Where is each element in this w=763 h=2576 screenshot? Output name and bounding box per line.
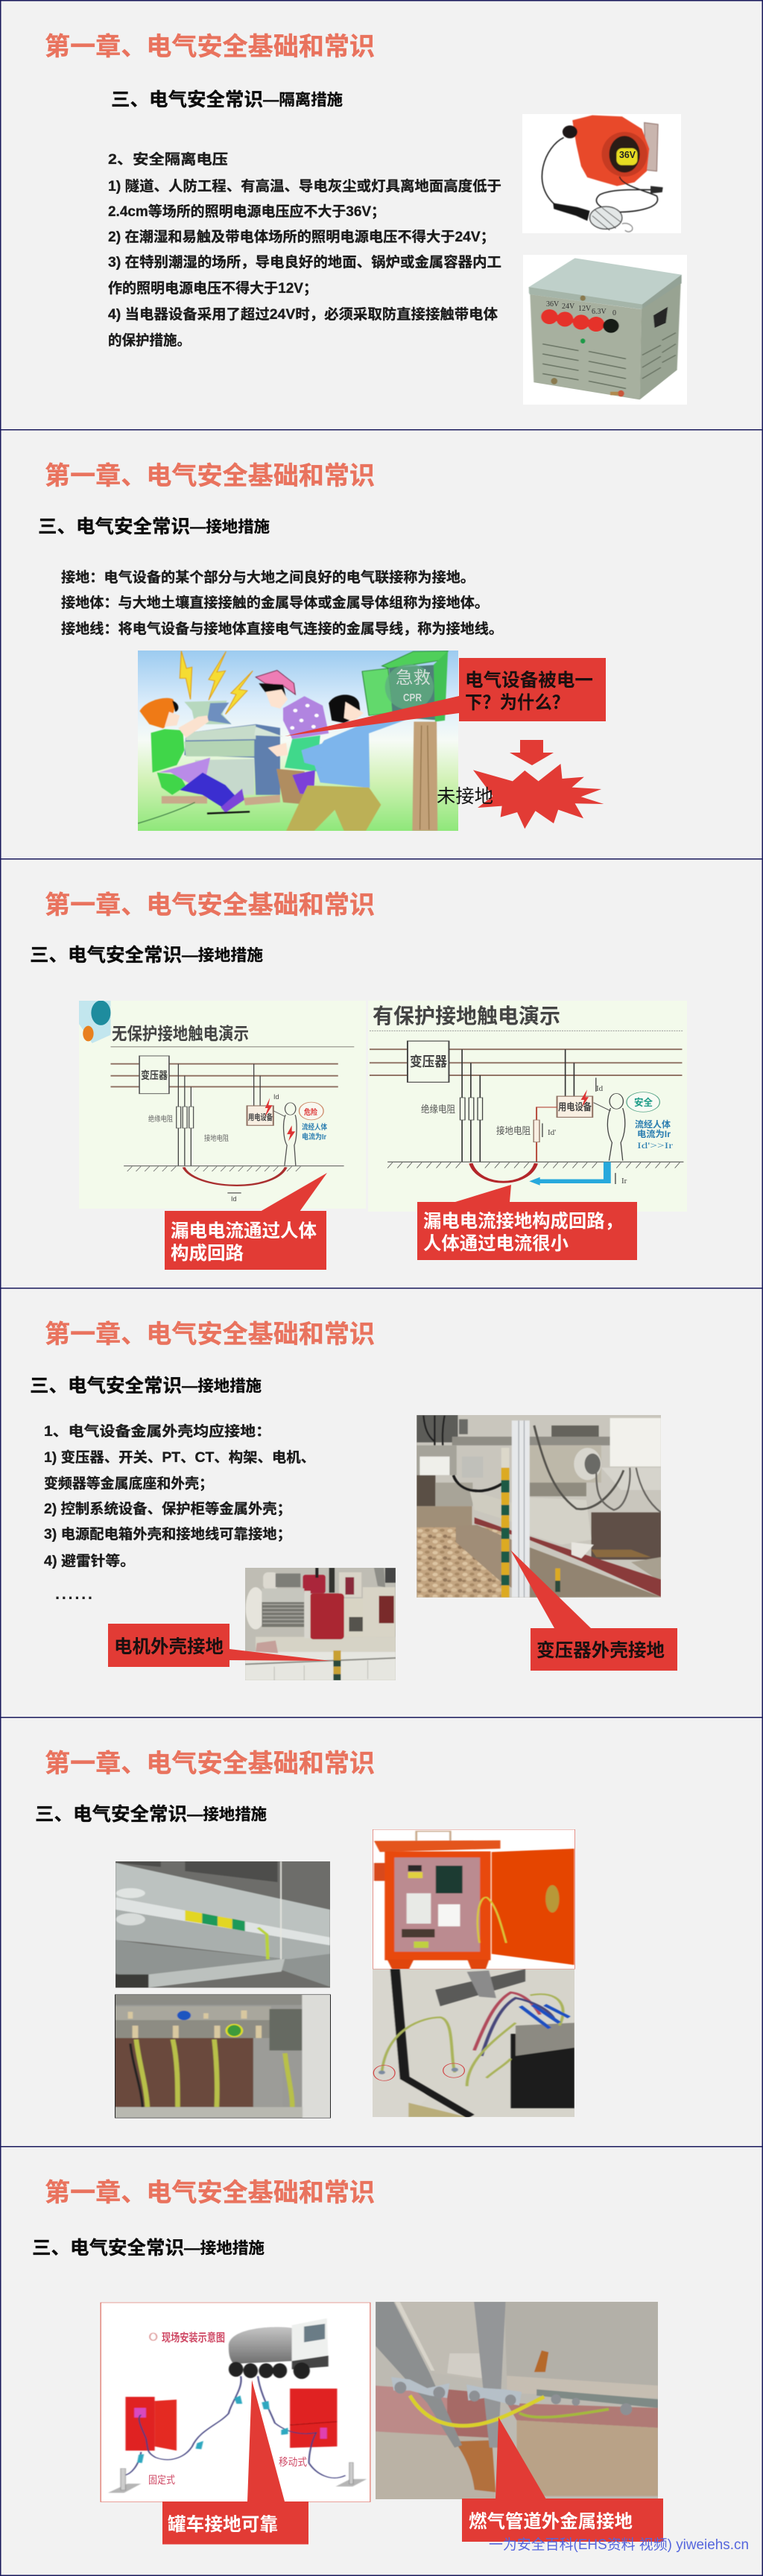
text block: safety voltages [108, 151, 501, 349]
callout: transformer enclosure grounding [510, 1550, 677, 1671]
section heading: 三、电气安全常识 [35, 1804, 187, 1825]
callout: leakage through body: 构成回路 [171, 1243, 244, 1264]
photo: orange distribution cabinet [373, 1829, 575, 1969]
callout: why shocked: 电气设备被电一 [465, 670, 593, 691]
diagram labels [141, 1069, 327, 1203]
diagram labels: Id [273, 1093, 279, 1101]
illustration: electric shock cartoon [138, 651, 458, 831]
label: not grounded: 未接地 [437, 786, 493, 807]
callout: gas pipeline metal grounding: 燃气管道外金属接地 [469, 2511, 633, 2532]
title: 第一章、电气安全基础和常识 [45, 1750, 375, 1778]
title: 第一章、电气安全基础和常识 [45, 1320, 375, 1349]
diagram labels: 移动式 [279, 2456, 307, 2468]
diagram labels: 固定式 [148, 2474, 175, 2486]
diagram title: 无保护接地触电演示 [112, 1024, 249, 1043]
diagram labels: Id [596, 1084, 604, 1093]
label: transformer voltages: 12V [578, 305, 592, 313]
text block: enclosure grounding list: 2) 控制系统设备、保护柜等金属外壳； [44, 1500, 291, 1517]
callout: tanker grounding reliable: 罐车接地可靠 [168, 2514, 278, 2535]
photo: 36V cable reel lamp [522, 114, 681, 233]
diagram labels: 流经人体 [635, 1118, 671, 1130]
diagram labels: 电流为Ir [637, 1128, 671, 1139]
text block: enclosure grounding list: 变频器等金属底座和外壳； [44, 1475, 213, 1492]
section heading [32, 2238, 265, 2259]
diagram: without protective grounding [79, 1001, 366, 1209]
text block: safety voltages: 的保护措施。 [108, 332, 191, 349]
callout: motor enclosure grounding: 电机外壳接地 [114, 1636, 224, 1657]
panel: slide 6 tanker and pipeline grounding [1, 2147, 762, 2575]
arrow: down [510, 740, 554, 765]
diagram labels: 变压器 [410, 1054, 447, 1069]
panel: slide 4 equipment enclosure grounding [1, 1288, 762, 1718]
text block: definitions: 接地线：将电气设备与接地体直接电气连接的金属导线，称为接地线。 [61, 620, 503, 637]
diagram labels: 安全 [634, 1097, 653, 1108]
label: transformer voltages: 36V [546, 300, 560, 308]
text block: safety voltages: 3) 在特别潮湿的场所，导电良好的地面、锅炉或金属容器内工 [108, 253, 501, 270]
icon: starburst [473, 764, 604, 829]
section heading: 三、电气安全常识 [32, 2238, 184, 2259]
callout: tanker grounding reliable [162, 2380, 308, 2544]
diagram labels: 接地电阻 [204, 1133, 229, 1143]
section heading: 三、电气安全常识 [111, 89, 263, 110]
panel: slide 2 grounding definitions [1, 430, 762, 859]
watermark footer: 一为安全百科(EHS资料 视频) yiweiehs.cn [489, 2537, 749, 2553]
callout: gas pipeline metal grounding [462, 2417, 663, 2542]
text block: enclosure grounding list: ...... [55, 1584, 92, 1603]
callout: leakage through ground: 人体通过电流很小 [423, 1233, 569, 1254]
photo: gas pipeline grounding jumper [376, 2302, 658, 2499]
callout: motor enclosure grounding [108, 1624, 331, 1667]
callout: leakage through ground: 漏电电流接地构成回路， [423, 1211, 623, 1232]
text: first aid sign: CPR [403, 692, 422, 704]
diagram labels [148, 2331, 307, 2486]
label: transformer voltages: 24V [562, 303, 575, 311]
text block: enclosure grounding list: 1、电气设备金属外壳均应接地： [44, 1423, 271, 1440]
panel: slide 3 grounding demonstration [1, 859, 762, 1288]
section heading: —接地措施 [182, 947, 263, 964]
diagram labels: 现场安装示意图 [162, 2331, 225, 2344]
photo: PE busbar [115, 1994, 331, 2118]
label: transformer voltages [546, 300, 616, 317]
diagram labels: 绝缘电阻 [148, 1114, 173, 1124]
panel: slide 5 grounding photos [1, 1718, 762, 2147]
diagram labels: Ir [621, 1177, 627, 1186]
section heading [30, 945, 263, 966]
section heading: —接地措施 [187, 1806, 267, 1823]
diagram labels: Id' [548, 1128, 556, 1137]
text block: safety voltages: 2.4cm等场所的照明电源电压应不大于36V； [108, 203, 385, 220]
diagram labels: 用电设备 [248, 1112, 273, 1122]
title: 第一章、电气安全基础和常识 [45, 33, 375, 61]
text block: enclosure grounding list: 1) 变压器、开关、PT、CT、构架、电机、 [44, 1449, 315, 1466]
diagram: tanker truck grounding [100, 2303, 371, 2502]
text: first aid sign: 急救 [396, 668, 431, 687]
text block: enclosure grounding list: 3) 电源配电箱外壳和接地线可靠接地； [44, 1526, 291, 1542]
photo: cable tray grounding [115, 1861, 330, 1988]
text: first aid sign [396, 668, 431, 704]
title: 第一章、电气安全基础和常识 [45, 891, 375, 920]
diagram labels: 变压器 [141, 1069, 168, 1081]
diagram labels: 用电设备 [558, 1101, 592, 1113]
section heading: 三、电气安全常识 [30, 1376, 182, 1396]
callout: why shocked: 下？为什么？ [465, 692, 569, 713]
text block: safety voltages: 4) 当电器设备采用了超过24V时，必须采取防直接接触带电体 [108, 306, 498, 323]
section heading: —隔离措施 [263, 91, 343, 109]
photo: cabinet interior grounding wires [373, 1969, 574, 2118]
diagram labels: 绝缘电阻 [421, 1104, 455, 1115]
callout: leakage through body [165, 1173, 327, 1270]
section heading: —接地措施 [184, 2240, 265, 2257]
diagram labels: Id'>>Ir [637, 1140, 673, 1151]
text block: safety voltages: 1) 隧道、人防工程、有高温、导电灰尘或灯具离地面高度低于 [108, 177, 501, 194]
text block: definitions: 接地：电气设备的某个部分与大地之间良好的电气联接称为接地。 [61, 569, 475, 586]
callout: leakage through body: 漏电电流通过人体 [171, 1221, 317, 1241]
section heading [111, 89, 343, 110]
callout: transformer enclosure grounding: 变压器外壳接地 [536, 1640, 665, 1661]
label: transformer voltages: 6.3V [592, 308, 607, 316]
section heading [35, 1804, 267, 1825]
diagram: with protective grounding [368, 1001, 687, 1212]
section heading: 三、电气安全常识 [30, 945, 182, 966]
panel: slide 1 isolation voltage [1, 1, 762, 430]
diagram labels: 接地电阻 [496, 1125, 531, 1136]
label: 36V on reel: 36V [619, 149, 636, 160]
diagram title: 有保护接地触电演示 [373, 1004, 560, 1028]
text block: definitions: 接地体：与大地土壤直接接触的金属导体或金属导体组称为接地体。 [61, 594, 489, 611]
label: transformer voltages: 0 [612, 309, 616, 317]
title: 第一章、电气安全基础和常识 [45, 2179, 375, 2207]
section heading: —接地措施 [182, 1378, 262, 1395]
section heading [38, 516, 270, 537]
diagram labels: 流经人体 [302, 1122, 327, 1132]
text block: enclosure grounding list: 4) 避雷针等。 [44, 1553, 135, 1569]
photo: isolation transformer [523, 255, 687, 405]
text block: safety voltages: 2) 在潮湿和易触及带电体场所的照明电源电压不得大于24V； [108, 229, 495, 245]
diagram labels: 危险 [304, 1107, 317, 1117]
text block: safety voltages: 作的照明电源电压不得大于12V； [108, 280, 317, 297]
diagram labels: Id [231, 1195, 237, 1203]
section heading [30, 1376, 262, 1396]
photo: transformer on rail [417, 1415, 661, 1598]
diagram labels [410, 1054, 673, 1186]
section heading: 三、电气安全常识 [38, 516, 190, 537]
title: 第一章、电气安全基础和常识 [45, 462, 375, 490]
callout: why shocked [285, 658, 606, 736]
section heading: —接地措施 [190, 519, 270, 536]
text block: definitions [61, 569, 503, 637]
callout: leakage through ground [417, 1185, 637, 1260]
photo: motor set [245, 1568, 396, 1680]
text block: enclosure grounding list [44, 1423, 315, 1603]
text block: safety voltages: 2、安全隔离电压 [108, 151, 228, 168]
diagram labels: 电流为Ir [302, 1132, 326, 1142]
